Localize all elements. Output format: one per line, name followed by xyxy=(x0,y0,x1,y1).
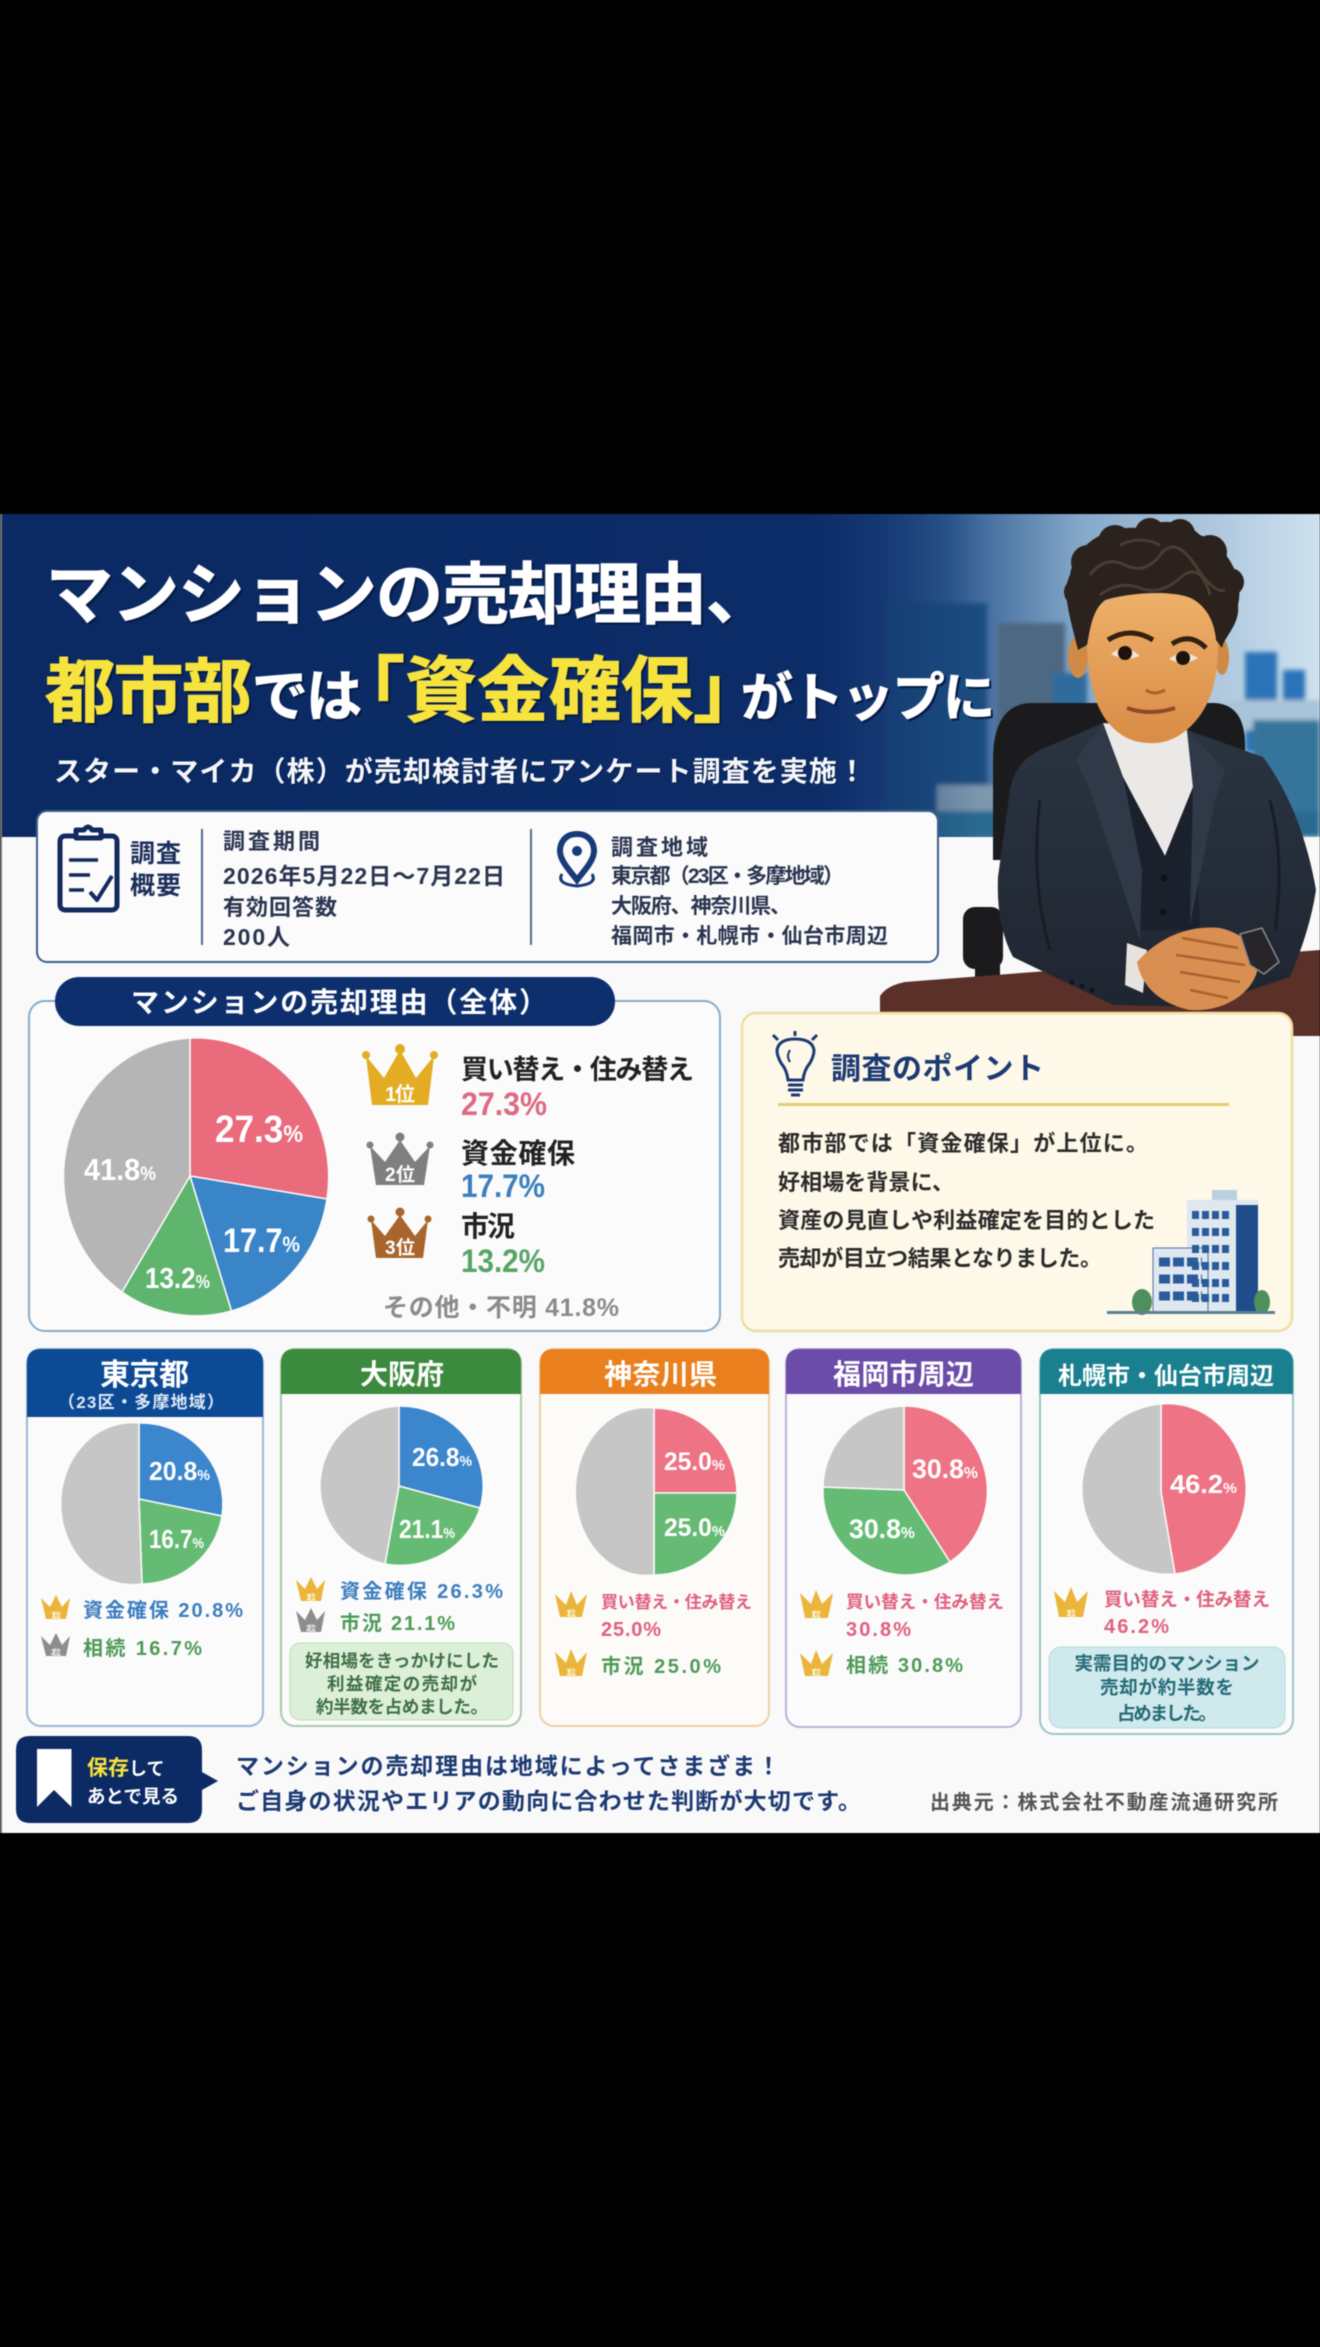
Sapporo ranking xyxy=(1054,1587,1270,1638)
title: 「資金確保」 xyxy=(333,652,765,732)
icon: building xyxy=(1107,1190,1275,1315)
icon: bookmark xyxy=(37,1749,72,1807)
source citation: 出典元：株式会社不動産流通研究所 xyxy=(930,1791,1278,1814)
card: Fukuoka xyxy=(786,1349,1021,1727)
Sapporo pie: 46.2% xyxy=(1170,1469,1237,1499)
card: Kanagawa xyxy=(540,1349,769,1726)
facial features xyxy=(1108,633,1206,712)
Sapporo pie xyxy=(1082,1404,1246,1574)
person at desk xyxy=(880,518,1320,1036)
survey period and respondents: 調査期間 xyxy=(223,829,320,854)
face xyxy=(1087,590,1218,743)
card: Kanagawa: 神奈川県 xyxy=(604,1359,717,1390)
icon: light bulb xyxy=(773,1031,817,1095)
card: Sapporo and Sendai xyxy=(1040,1349,1293,1734)
point body text: 売却が目立つ結果となりました。 xyxy=(778,1246,1102,1271)
left edge line xyxy=(0,514,2,1833)
Kanagawa ranking: 1位 xyxy=(566,1608,576,1618)
Kanagawa ranking: 市況 25.0% xyxy=(601,1655,721,1678)
overview label: 調査 xyxy=(130,840,181,868)
Kanagawa ranking: 1位 xyxy=(566,1667,576,1677)
card: Osaka: 大阪府 xyxy=(360,1359,444,1390)
header banner with skyline xyxy=(0,514,1320,843)
Fukuoka pie: 30.8% xyxy=(849,1514,915,1544)
Kanagawa pie xyxy=(575,1408,737,1576)
Osaka pie xyxy=(320,1406,483,1565)
survey area: 福岡市・札幌市・仙台市周辺 xyxy=(611,925,888,948)
Tokyo ranking: 相続 16.7% xyxy=(83,1637,202,1660)
rank 1 xyxy=(362,1044,694,1122)
card: Fukuoka: 福岡市周辺 xyxy=(833,1359,974,1390)
Kanagawa ranking: 25.0% xyxy=(601,1619,661,1641)
rank 1: 27.3% xyxy=(461,1086,547,1122)
rank 3: 市況 xyxy=(461,1211,515,1242)
Tokyo pie: 16.7% xyxy=(149,1524,204,1554)
Fukuoka ranking: 相続 30.8% xyxy=(846,1654,963,1677)
survey area: 東京都（23区・多摩地域） xyxy=(611,865,844,888)
Osaka pie: 26.8% xyxy=(412,1442,472,1472)
closing message xyxy=(236,1753,861,1814)
panel: survey overview xyxy=(37,811,938,962)
save callout: 保存して xyxy=(87,1757,164,1780)
Fukuoka ranking: 買い替え・住み替え xyxy=(846,1592,1004,1612)
rank 2: 2位 xyxy=(385,1164,415,1186)
Sapporo note: 売却が約半数を xyxy=(1100,1677,1234,1698)
Tokyo pie: 20.8% xyxy=(149,1456,210,1486)
save callout xyxy=(16,1736,218,1823)
survey area xyxy=(611,835,888,948)
Fukuoka pie: 30.8% xyxy=(912,1454,978,1484)
Fukuoka ranking: 1位 xyxy=(811,1667,821,1677)
Osaka ranking: 市況 21.1% xyxy=(340,1612,455,1635)
card: Osaka xyxy=(281,1349,521,1726)
card: Tokyo xyxy=(27,1349,263,1726)
ears xyxy=(1068,636,1088,678)
Osaka pie: 21.1% xyxy=(399,1514,455,1544)
title xyxy=(45,558,995,732)
page background xyxy=(0,514,1320,1833)
point body text xyxy=(778,1131,1155,1271)
card: Tokyo: （23区・多摩地域） xyxy=(58,1392,224,1412)
Fukuoka ranking: 1位 xyxy=(811,1609,821,1619)
overall pie chart: 17.7% xyxy=(223,1222,300,1260)
save callout: あとで見る xyxy=(87,1786,179,1807)
Fukuoka pie xyxy=(823,1406,987,1575)
Sapporo ranking: 1位 xyxy=(1066,1608,1076,1618)
title: 都市部 xyxy=(45,653,252,731)
survey period and respondents: 有効回答数 xyxy=(223,895,337,920)
Osaka note: 利益確定の売却が xyxy=(327,1674,478,1694)
vest xyxy=(1123,777,1200,930)
other share: その他・不明 41.8% xyxy=(383,1294,619,1322)
lapels xyxy=(1076,723,1142,940)
Tokyo ranking: 1位 xyxy=(51,1610,61,1620)
rank 3 xyxy=(368,1208,545,1279)
Kanagawa pie: 25.0% xyxy=(664,1448,725,1476)
card: Sapporo and Sendai: 札幌市・仙台市周辺 xyxy=(1058,1363,1274,1390)
point body text: 都市部では「資金確保」が上位に。 xyxy=(778,1131,1148,1156)
heading pill: マンションの売却理由（全体） xyxy=(131,987,547,1018)
Tokyo ranking: 2位 xyxy=(51,1647,61,1657)
survey period and respondents: 200人 xyxy=(223,924,290,950)
rank 2: 資金確保 xyxy=(461,1138,575,1169)
Osaka note: 約半数を占めました。 xyxy=(316,1697,488,1717)
sleeve folds and buttons xyxy=(1037,800,1279,992)
suit jacket xyxy=(998,723,1316,1007)
closing message: ご自身の状況やエリアの動向に合わせた判断が大切です。 xyxy=(236,1788,861,1814)
panel: survey point xyxy=(742,1013,1292,1331)
Fukuoka ranking: 30.8% xyxy=(846,1619,911,1641)
point heading: 調査のポイント xyxy=(831,1053,1044,1086)
Sapporo note: 占めました。 xyxy=(1117,1703,1217,1724)
Osaka ranking xyxy=(296,1577,503,1635)
Sapporo ranking: 買い替え・住み替え xyxy=(1104,1589,1270,1610)
closing message: マンションの売却理由は地域によってさまざま！ xyxy=(236,1753,780,1779)
shirt xyxy=(1103,723,1193,856)
Tokyo pie xyxy=(61,1423,223,1585)
Kanagawa ranking xyxy=(555,1591,752,1678)
rank 2: 17.7% xyxy=(461,1168,545,1204)
card: Tokyo: 東京都 xyxy=(100,1359,189,1392)
overview label xyxy=(130,840,181,900)
title: マンションの売却理由、 xyxy=(46,558,773,633)
overview label: 概要 xyxy=(130,872,181,900)
survey period and respondents xyxy=(223,829,505,950)
overall pie chart: 27.3% xyxy=(215,1109,303,1151)
survey area: 調査地域 xyxy=(611,835,708,860)
panel: overall reasons xyxy=(29,977,720,1331)
rank 3: 13.2% xyxy=(461,1243,545,1279)
Osaka ranking: 資金確保 26.3% xyxy=(340,1580,503,1603)
cuff xyxy=(1125,943,1147,993)
survey period and respondents: 2026年5月22日～7月22日 xyxy=(223,863,505,889)
rank 2 xyxy=(366,1132,575,1204)
rank 1: 1位 xyxy=(385,1083,415,1106)
hair xyxy=(1064,518,1244,650)
Sapporo note xyxy=(1049,1647,1285,1728)
watch xyxy=(1240,928,1279,974)
title: では xyxy=(252,665,362,728)
rank 3: 3位 xyxy=(385,1237,415,1259)
subtitle: スター・マイカ（株）が売却検討者にアンケート調査を実施！ xyxy=(54,755,866,787)
Osaka note: 好相場をきっかけにした xyxy=(305,1651,499,1671)
Tokyo ranking: 資金確保 20.8% xyxy=(83,1599,243,1622)
desk xyxy=(880,950,1320,1036)
Kanagawa ranking: 買い替え・住み替え xyxy=(601,1593,752,1612)
overall pie chart: 41.8% xyxy=(84,1152,156,1187)
overall pie chart xyxy=(63,1038,329,1316)
point body text: 好相場を背景に、 xyxy=(778,1170,954,1195)
point body text: 資産の見直しや利益確定を目的とした xyxy=(778,1208,1155,1233)
Kanagawa pie: 25.0% xyxy=(664,1514,725,1542)
Sapporo note: 実需目的のマンション xyxy=(1074,1653,1260,1674)
chair xyxy=(963,703,1245,990)
icon: clipboard xyxy=(60,827,117,910)
title: がトップに xyxy=(741,670,995,728)
heading pill xyxy=(55,977,615,1026)
Osaka note xyxy=(290,1643,513,1720)
icon: map pin xyxy=(560,834,594,886)
Fukuoka ranking xyxy=(800,1590,1004,1677)
overall pie chart: 13.2% xyxy=(145,1263,210,1295)
Osaka ranking: 1位 xyxy=(306,1592,316,1602)
rank 1: 買い替え・住み替え xyxy=(461,1055,694,1085)
clasped hands xyxy=(1137,928,1258,1010)
Osaka ranking: 2位 xyxy=(306,1623,316,1633)
survey area: 大阪府、神奈川県、 xyxy=(611,895,791,918)
Tokyo ranking xyxy=(41,1595,243,1660)
Sapporo ranking: 46.2% xyxy=(1104,1616,1169,1638)
